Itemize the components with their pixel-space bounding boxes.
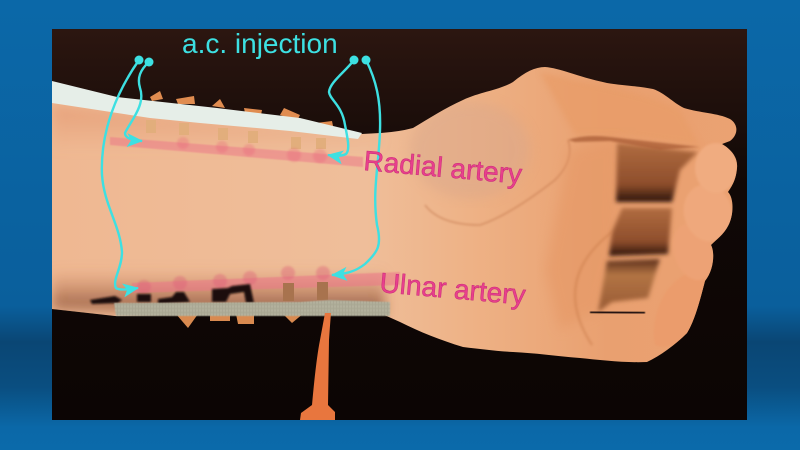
arrow: right outer to radial	[328, 56, 358, 156]
ulnar artery contact points	[137, 266, 330, 294]
dark gaps between fingers	[598, 143, 698, 312]
palm shading	[548, 153, 595, 321]
little finger	[672, 280, 706, 346]
palm crease	[575, 232, 612, 345]
terminal dot	[350, 56, 358, 64]
thumb shading	[544, 74, 689, 140]
heading: a.c. injection: a.c. injection	[182, 28, 338, 59]
wire path	[125, 62, 149, 141]
wire path	[102, 60, 139, 290]
terminal dot	[134, 56, 144, 64]
ulnar artery band	[132, 272, 400, 293]
thenar pad	[414, 102, 524, 194]
wire path	[332, 60, 380, 275]
gap between index and middle	[616, 143, 698, 202]
photo backdrop	[52, 29, 747, 420]
radial electrode strip	[52, 81, 363, 167]
orange stand	[300, 313, 335, 420]
white tape	[52, 81, 362, 139]
gap between middle and ring	[609, 208, 672, 256]
grey fabric tape	[114, 300, 390, 316]
fold between palm and thenar	[425, 140, 570, 225]
thumb underside shadow	[568, 136, 700, 150]
radial artery band	[110, 137, 363, 167]
wire path	[328, 60, 354, 156]
fingertips	[672, 143, 738, 346]
upper copper tabs	[150, 91, 333, 127]
ulnar electrode strip	[90, 266, 400, 420]
index fingertip	[695, 143, 737, 193]
arrow: left inner to radial	[125, 58, 154, 141]
forearm and hand	[52, 60, 747, 370]
lower copper tabs	[146, 120, 326, 149]
dark electrode marks	[90, 284, 254, 304]
black pen line on finger	[590, 312, 645, 313]
forearm edge shading	[52, 105, 385, 315]
ring fingertip	[688, 244, 714, 278]
arrow: radial left outer to ulnar	[102, 56, 144, 290]
arrow: right inner to ulnar	[332, 56, 380, 275]
lower copper tabs	[283, 282, 328, 301]
gap between ring and little	[598, 259, 660, 312]
hand and forearm silhouette	[52, 60, 747, 370]
panel: photograph	[52, 28, 747, 420]
radial artery contact points	[177, 137, 327, 163]
terminal dot	[362, 56, 370, 64]
label: ulnar artery: Ulnar artery	[378, 267, 527, 311]
terminal dot	[144, 58, 154, 66]
label: radial artery: Radial artery	[362, 145, 523, 190]
middle fingertip	[684, 186, 732, 242]
hanging copper tabs	[176, 313, 304, 328]
